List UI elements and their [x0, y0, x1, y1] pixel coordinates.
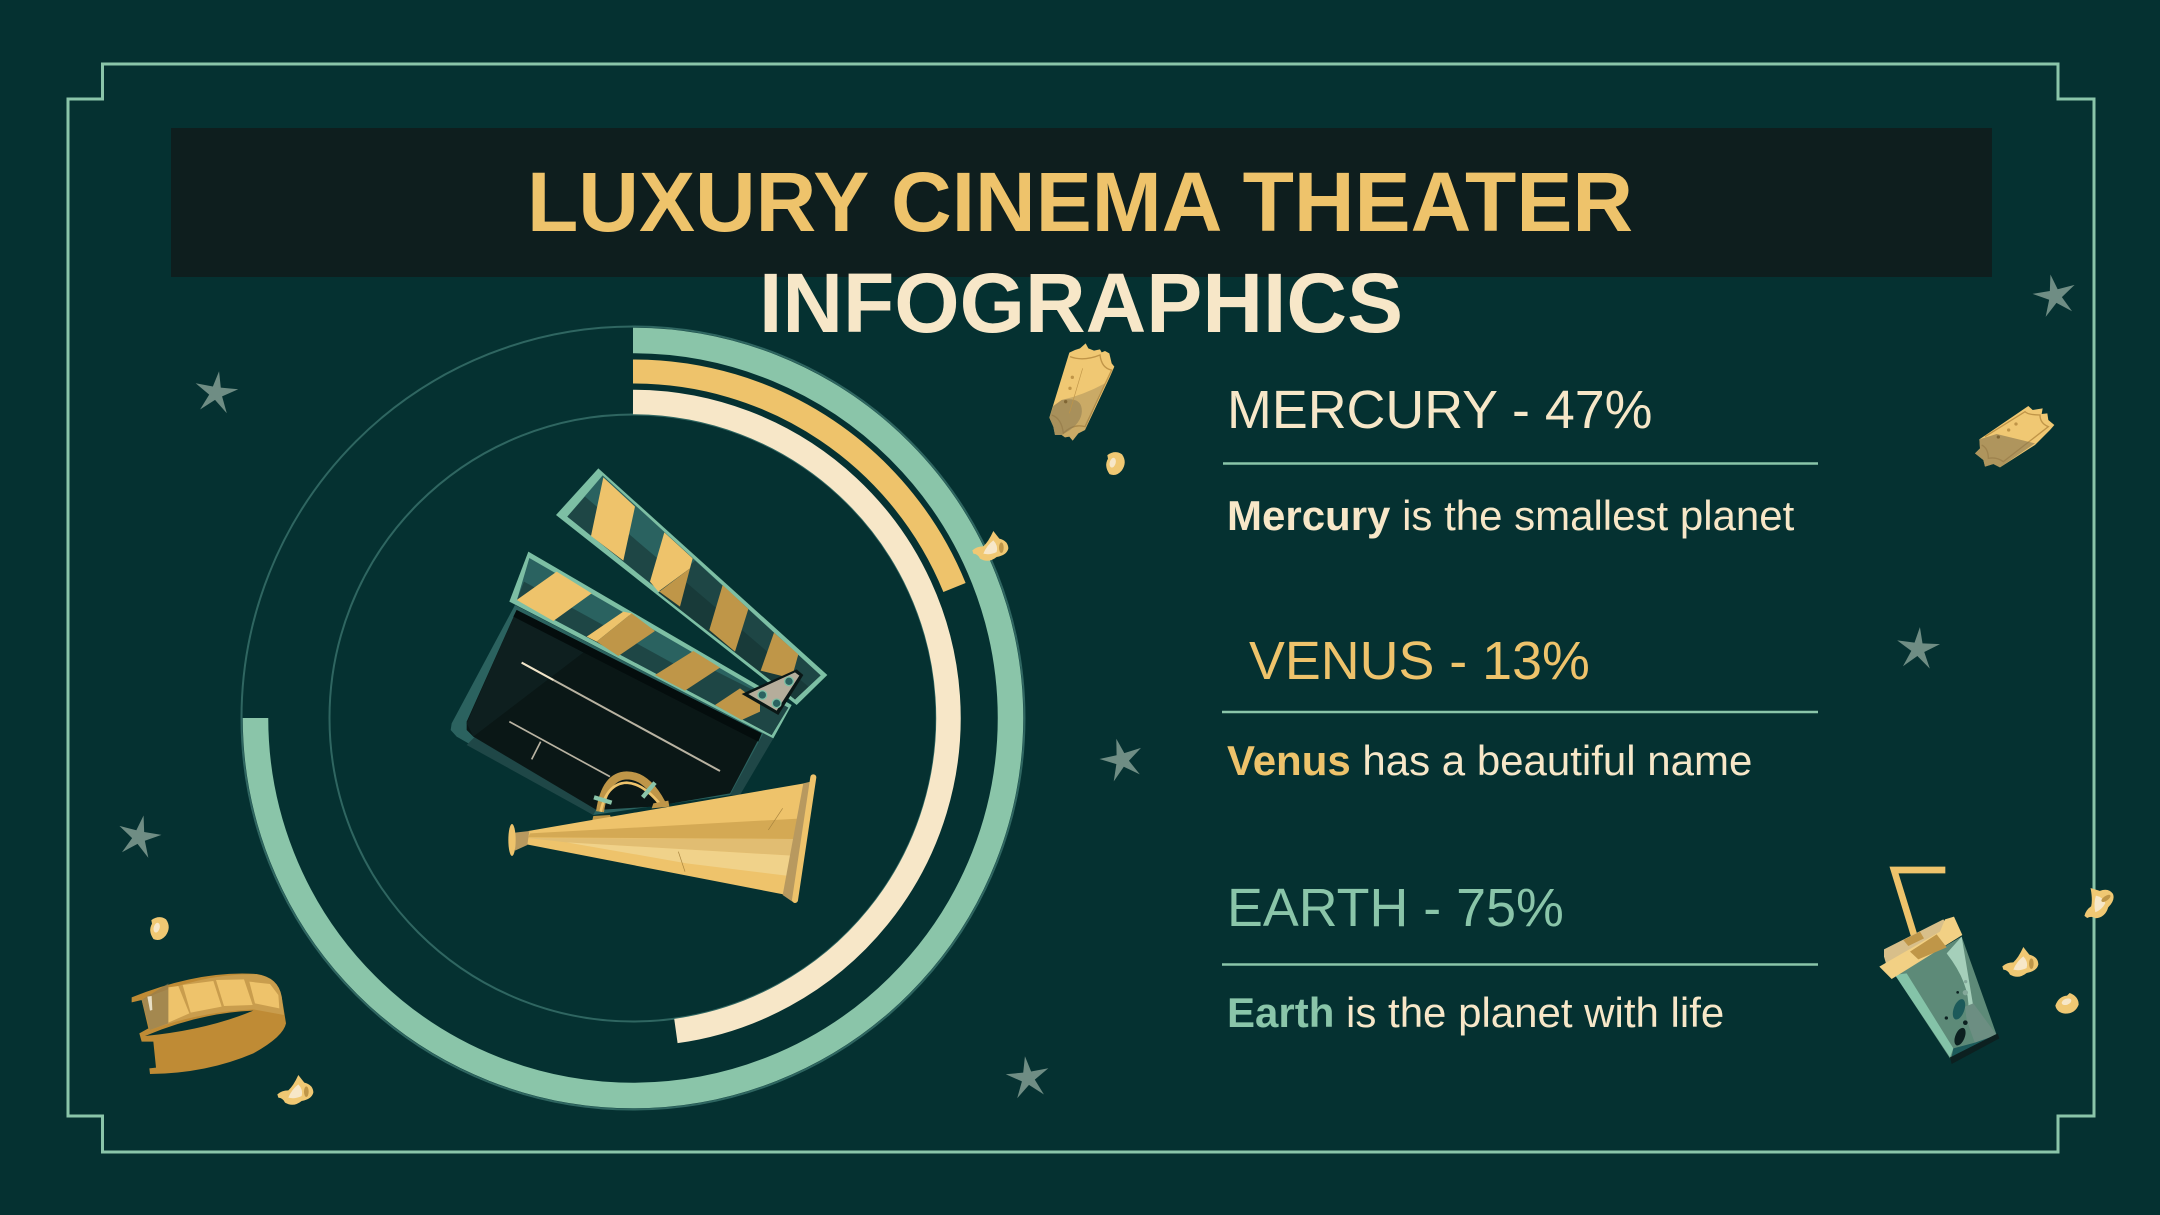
icon: ticket large	[1049, 343, 1114, 441]
lower clapper stick	[509, 552, 792, 738]
popcorn pieces	[143, 448, 2120, 1105]
icon: film strip	[132, 973, 286, 1074]
icon: drink cup	[1879, 870, 1999, 1064]
title: LUXURY CINEMA THEATER	[527, 155, 1633, 249]
icon: ticket small	[1975, 406, 2054, 467]
icon: megaphone	[508, 775, 813, 902]
item: earth: Earth is the planet with life	[1227, 989, 1724, 1036]
title: INFOGRAPHICS	[759, 256, 1403, 350]
item: mercury	[1223, 380, 1818, 539]
item: mercury: MERCURY - 47%	[1227, 380, 1653, 440]
item: earth: EARTH - 75%	[1227, 878, 1564, 938]
star decorations	[114, 270, 2080, 1099]
item: venus: Venus has a beautiful name	[1227, 737, 1752, 784]
item: earth	[1222, 878, 1818, 1036]
upper clapper stick	[556, 468, 827, 705]
item: venus	[1222, 631, 1818, 784]
item: mercury: Mercury is the smallest planet	[1227, 492, 1795, 539]
title bar	[171, 128, 1992, 277]
icon: clapperboard	[451, 468, 827, 815]
title	[527, 155, 1633, 350]
clapper hinge	[742, 669, 803, 715]
radial progress chart	[242, 326, 1024, 1110]
item: venus: VENUS - 13%	[1249, 631, 1590, 691]
